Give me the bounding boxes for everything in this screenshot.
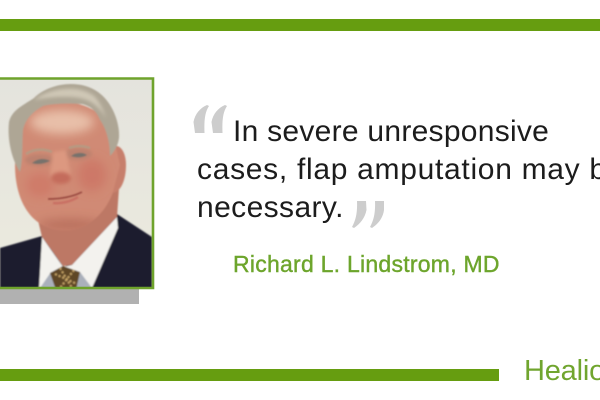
portrait photo	[0, 77, 154, 290]
neck	[36, 185, 119, 266]
chin shadow	[38, 219, 102, 231]
forehead highlight	[30, 110, 94, 134]
collar stripes	[40, 272, 92, 288]
quote text: In severe unresponsive	[233, 115, 549, 148]
hair	[9, 84, 119, 172]
tie	[50, 266, 80, 290]
cheek tones	[28, 174, 52, 196]
photo drop shadow	[0, 285, 139, 304]
quote text	[197, 115, 600, 224]
mouth	[48, 192, 82, 199]
ear	[112, 146, 126, 193]
eyes	[32, 159, 50, 164]
attribution: Richard L. Lindstrom, MD	[233, 251, 500, 277]
shirt	[39, 217, 118, 288]
face	[15, 102, 120, 230]
closing quotation mark	[352, 201, 384, 228]
suit	[0, 214, 152, 290]
quote text: necessary.	[197, 191, 344, 224]
brows	[26, 150, 52, 154]
bottom green bar	[0, 369, 499, 381]
nose	[50, 150, 70, 176]
photo frame	[0, 78, 153, 288]
opening quotation mark	[194, 105, 227, 133]
top green bar	[0, 19, 600, 31]
eye sockets	[26, 154, 52, 166]
